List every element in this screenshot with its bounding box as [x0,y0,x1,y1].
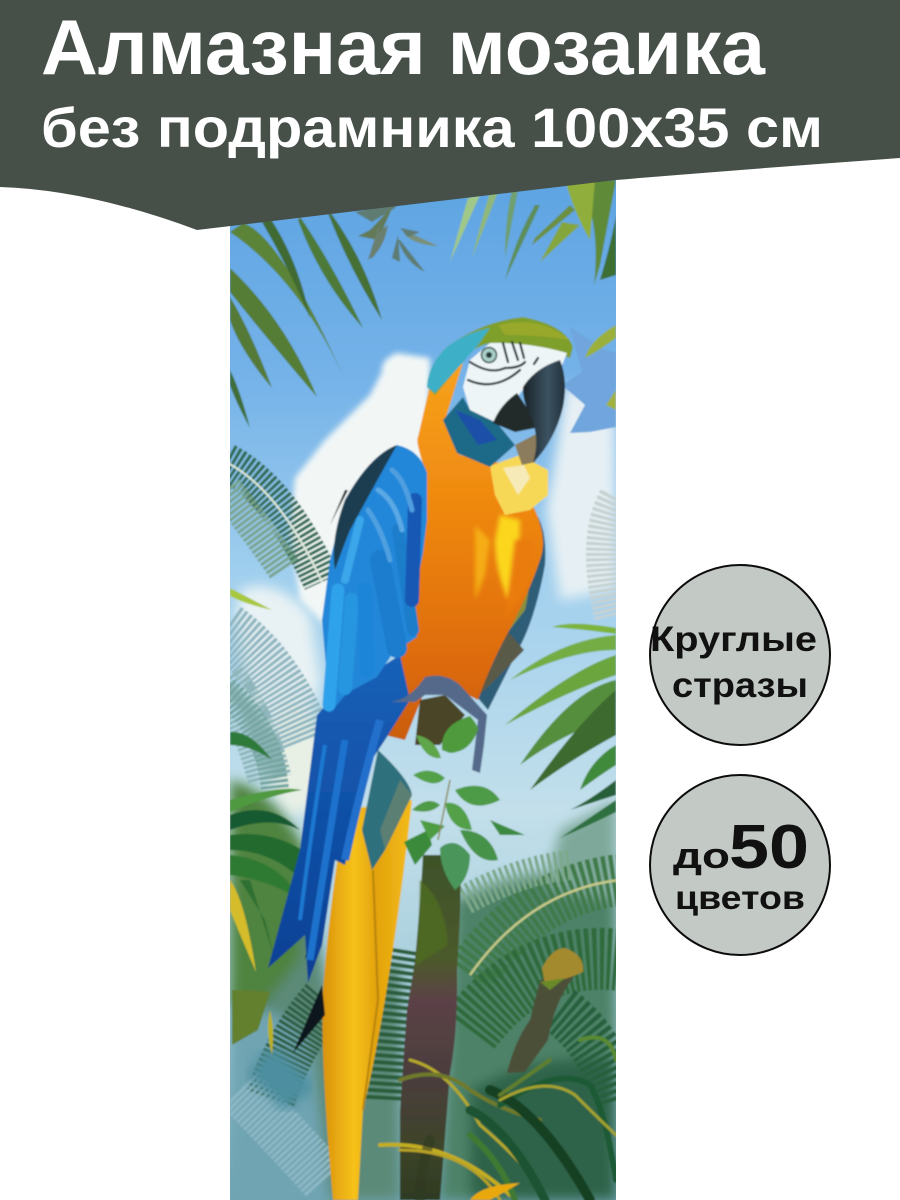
leaves: top centre sprig [355,202,438,272]
badge: up to 50 colours: до [673,835,730,876]
right wing dark [477,505,545,710]
body [385,363,543,740]
tail dark base [362,750,412,870]
palm fronds: lower centre and left [240,950,405,1180]
lower jungle decoration: trunk [400,855,461,1200]
mosaic picture: macaw parrot in jungle [225,170,621,1200]
blue shadow leaf at right [562,327,616,433]
cheek [443,397,515,467]
head crest [427,317,573,395]
chest highlights [495,515,520,600]
badge: up to 50 colours [650,775,830,955]
eye [482,348,496,362]
sky background [225,170,621,1200]
badge: up to 50 colours: цветов [675,879,805,916]
wing upper [322,445,427,713]
jungle base colour [230,780,616,1200]
face stripes [468,342,538,384]
green leaves [404,716,525,890]
side stump [507,948,583,1073]
beak upper [523,360,565,463]
foot [390,676,487,773]
badge: round rhinestones: Круглые [650,620,817,659]
beak lower [493,393,540,432]
wing feathers [329,470,415,705]
palm frond: right pale [608,500,620,615]
badge: round rhinestones: стразы [672,666,808,705]
badge: up to 50 colours: 50 [729,813,809,882]
clouds [235,353,616,760]
palm frond: left upper [226,462,322,582]
badge: round rhinestones [650,565,830,745]
blades: top right [450,180,616,410]
palm fronds: lower right [465,865,620,1100]
blades: lower left [230,732,302,1055]
primary feathers [268,655,410,983]
blades: right middle [230,588,616,838]
header banner [0,0,900,230]
yellow tail [322,800,412,1200]
yellow bib [490,455,548,515]
curved grass blades in foreground [380,1038,616,1200]
macaw parrot [268,317,573,1200]
black tail feather [293,985,325,1053]
title: Алмазная мозаика [41,3,766,91]
white face [463,343,567,423]
subtitle: без подрамника 100х35 см [41,96,823,159]
blades: top left [230,212,382,428]
palm frond: left pale [225,630,305,790]
